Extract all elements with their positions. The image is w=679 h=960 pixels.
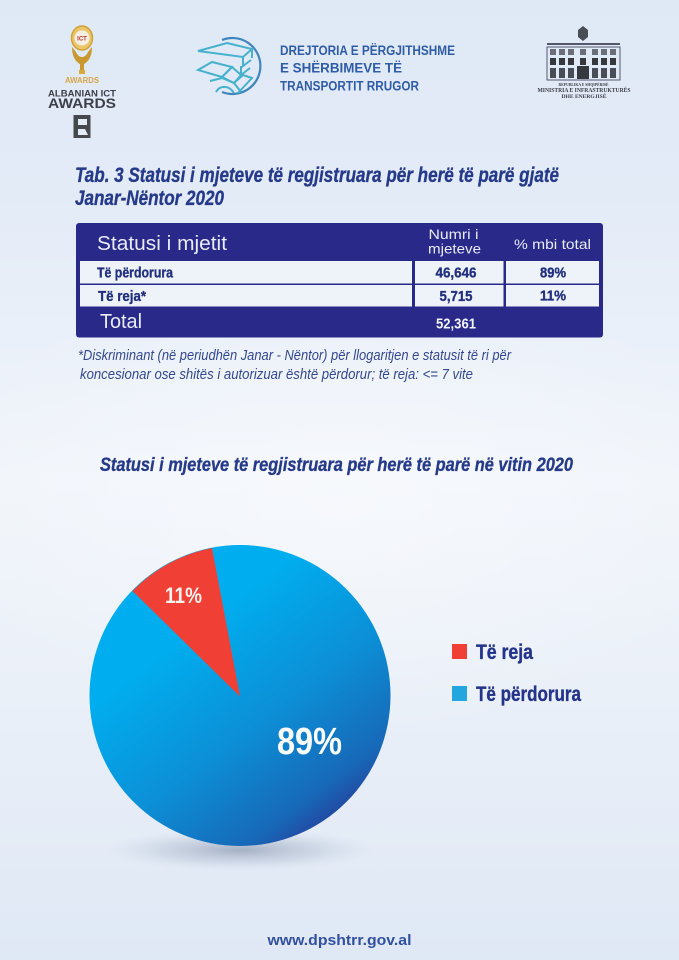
table row: new	[80, 285, 599, 306]
icon: trophy: ICT	[77, 36, 87, 42]
logo text: directorate name: TRANSPORTIT RRUGOR	[280, 78, 419, 94]
table header: Statusi i mjetit	[97, 233, 227, 255]
table row: used	[80, 261, 599, 284]
chart title: Statusi i mjeteve të regjistruara për herë të parë në vitin 2020	[100, 454, 573, 476]
table: vehicle status	[76, 223, 603, 338]
footnote: *Diskriminant (në periudhën Janar - Nëntor) për llogaritjen e statusit të ri për	[78, 348, 512, 364]
logo: Albanian ICT Awards: AWARDS	[65, 76, 100, 85]
table header: % mbi total	[514, 236, 591, 252]
table row: used: 89%	[540, 264, 566, 282]
table row: total: 52,361	[436, 316, 476, 332]
legend item: new: Të reja	[476, 641, 533, 664]
icon: ministry building	[547, 43, 620, 80]
legend	[452, 641, 581, 706]
label: 11%: 11%	[165, 583, 202, 608]
logo text: directorate name: DREJTORIA E PËRGJITHSHME	[280, 43, 455, 58]
logo: ministry: REPUBLIKA E SHQIPËRISË	[558, 82, 609, 87]
icon: 8 badge	[74, 115, 90, 138]
pie chart	[90, 545, 390, 871]
logo: ministry: MINISTRIA E INFRASTRUKTURËS	[538, 87, 631, 94]
footnote: koncesionar ose shitës i autorizuar është përdorur; të reja: <= 7 vite	[80, 367, 473, 383]
table header: mjeteve	[428, 240, 481, 256]
table row: used: Të përdorura	[97, 264, 174, 282]
table row: new: 11%	[540, 288, 566, 304]
title: table heading: Tab. 3 Statusi i mjeteve të regjistruara për herë të parë gjatë	[75, 164, 559, 187]
table row: total	[100, 311, 476, 333]
pie slice: new 11%	[132, 548, 240, 696]
title: table heading: Janar-Nëntor 2020	[75, 187, 224, 210]
logo: Albanian ICT Awards	[48, 26, 116, 138]
label: 89%: 89%	[277, 721, 342, 763]
table row: new: 5,715	[440, 288, 472, 305]
footnote	[78, 348, 512, 383]
table header	[97, 227, 591, 256]
legend item: used: Të përdorura	[476, 683, 581, 706]
table header: Numri i	[428, 227, 478, 242]
pie slice: used 89%	[90, 545, 390, 846]
logo text: directorate name	[280, 43, 455, 94]
table row: total: Total	[100, 311, 142, 333]
table row: used: 46,646	[436, 264, 476, 282]
title: table heading	[75, 164, 559, 210]
table row: new: Të reja*	[98, 288, 146, 305]
logo: Albanian ICT Awards: ALBANIAN ICT	[48, 88, 116, 100]
logo text: directorate name: E SHËRBIMEVE TË	[280, 60, 402, 76]
logo: Albanian ICT Awards: AWARDS	[48, 95, 116, 111]
logo: ministry: DHE ENERGJISË	[562, 93, 607, 100]
logo: DPSHTRR emblem	[198, 38, 260, 94]
logo: ministry	[538, 26, 631, 100]
icon: emblem	[578, 26, 588, 41]
footer: website: www.dpshtrr.gov.al	[266, 933, 412, 949]
